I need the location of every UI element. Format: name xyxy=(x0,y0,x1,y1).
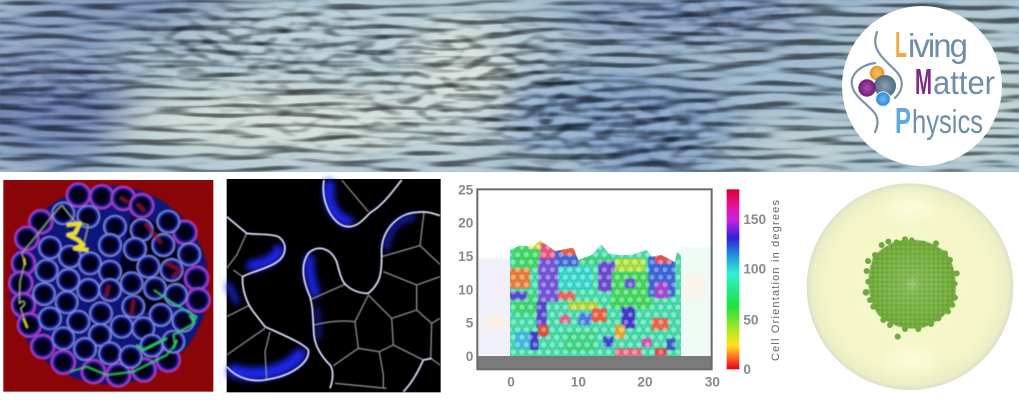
colour bar xyxy=(727,189,739,369)
logo word: Physics: hysics xyxy=(912,103,983,140)
yellow trajectory xyxy=(19,205,88,328)
logo word: Physics: P xyxy=(895,100,911,141)
green cluster xyxy=(863,236,960,340)
y axis labels: 25 xyxy=(458,182,474,197)
logo swirl lines xyxy=(852,32,902,132)
plot colour patches xyxy=(508,238,683,356)
panel: tissue edges on black xyxy=(227,179,441,392)
inner cell junctions xyxy=(227,180,440,388)
soft sphere highlights xyxy=(887,198,933,368)
x axis labels: 10 xyxy=(571,375,586,390)
colour bar labels: 0 xyxy=(743,362,751,377)
outer cells with magenta rims xyxy=(9,183,210,387)
y axis labels: 20 xyxy=(458,216,474,231)
colour bar labels xyxy=(743,212,767,377)
logo word: Living: L xyxy=(895,24,907,65)
ghost periodic cells xyxy=(478,247,711,356)
logo: Living Matter Physics xyxy=(842,6,1002,166)
logo word: Living: iving xyxy=(908,27,968,64)
bright outer boundaries xyxy=(227,180,440,392)
blue glow crescents xyxy=(228,185,413,374)
x axis labels: 0 xyxy=(507,375,515,390)
logo word: Matter: M xyxy=(915,61,932,102)
logo spheres xyxy=(858,66,896,106)
panel: sphere with green cell cluster xyxy=(807,183,1013,390)
logo word: Physics xyxy=(895,100,983,141)
colour bar title: Cell Orientation in degrees xyxy=(770,200,782,361)
colour bar labels: 50 xyxy=(743,312,759,327)
banner: ripple pattern xyxy=(0,0,1019,183)
red trajectory xyxy=(107,198,180,313)
y axis labels: 15 xyxy=(458,249,474,264)
colour bar labels: 150 xyxy=(743,212,767,227)
x axis labels: 30 xyxy=(705,375,720,390)
logo word: Matter xyxy=(915,61,995,102)
y axis labels: 10 xyxy=(458,282,474,297)
colour bar labels: 100 xyxy=(743,262,767,277)
green trajectory xyxy=(71,290,197,375)
y axis labels: 0 xyxy=(466,349,474,364)
inner cells xyxy=(33,202,200,368)
y axis labels: 5 xyxy=(466,316,474,331)
logo word: Matter: atter xyxy=(933,64,995,101)
panel: cell orientation chart xyxy=(458,182,767,390)
x axis labels: 20 xyxy=(637,375,653,390)
x axis labels xyxy=(507,375,720,390)
plot frame xyxy=(477,189,712,369)
substrate bar xyxy=(477,356,712,369)
panel: cell colony on red background xyxy=(3,180,213,392)
y axis labels xyxy=(458,182,474,364)
